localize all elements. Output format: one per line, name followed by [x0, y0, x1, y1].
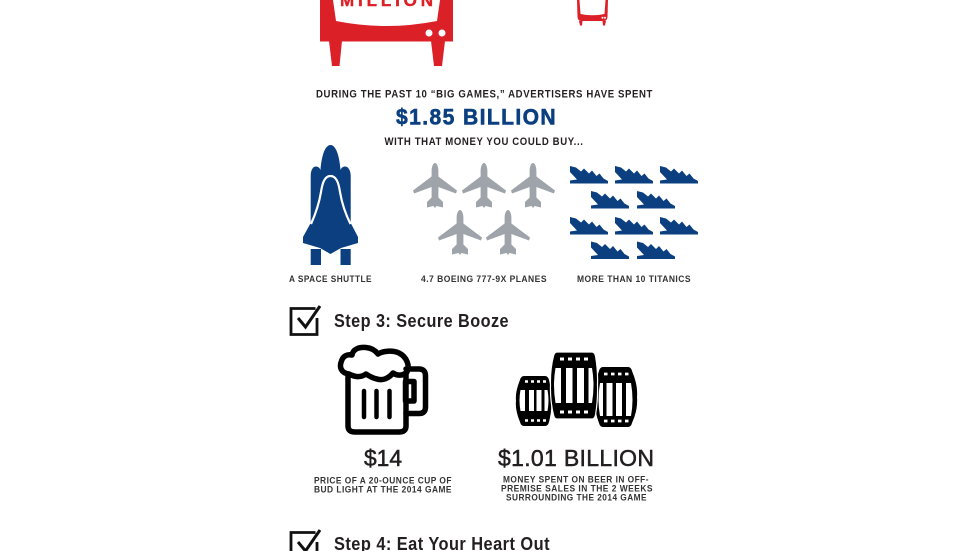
- Titanics caption: MORE THAN 10 TITANICS: [577, 274, 691, 284]
- planes caption: 4.7 BOEING 777-9X PLANES: [421, 274, 547, 284]
- center barrel: [550, 352, 598, 419]
- icon: ten sinking Titanics: [570, 166, 698, 259]
- right barrel: [595, 367, 637, 427]
- big red TV: [320, 0, 453, 66]
- beer price caption: [314, 476, 452, 494]
- icon: step 4 checkbox: [291, 530, 320, 551]
- beer price caption: BUD LIGHT AT THE 2014 GAME: [314, 484, 452, 494]
- icon: three beer barrels: [516, 352, 637, 427]
- shuttle caption: A SPACE SHUTTLE: [289, 274, 372, 284]
- left barrel: [516, 376, 551, 426]
- beer spending caption: SURROUNDING THE 2014 GAME: [506, 493, 647, 503]
- spending intro text: DURING THE PAST 10 “BIG GAMES,” ADVERTISERS HAVE SPENT: [316, 88, 653, 100]
- step 3 heading: Step 3: Secure Booze: [334, 311, 509, 331]
- icon: five grey Boeing planes: [413, 163, 555, 255]
- beer price caption: PRICE OF A 20-OUNCE CUP OF: [314, 476, 452, 486]
- beer spending caption: MONEY SPENT ON BEER IN OFF-: [503, 475, 649, 485]
- $1.01 billion figure: $1.01 BILLION: [498, 445, 654, 471]
- icon: space shuttle: [303, 145, 358, 265]
- icon: beer mug: [340, 347, 426, 432]
- $1.85 billion figure: $1.85 BILLION: [396, 104, 557, 130]
- $14 figure: $14: [364, 445, 402, 471]
- with that money text: WITH THAT MONEY YOU COULD BUY...: [384, 136, 584, 148]
- beer spending caption: [501, 475, 653, 503]
- beer spending caption: PREMISE SALES IN THE 2 WEEKS: [501, 484, 653, 494]
- small red TV: [577, 0, 608, 26]
- icon: step 3 checkbox: [291, 306, 320, 334]
